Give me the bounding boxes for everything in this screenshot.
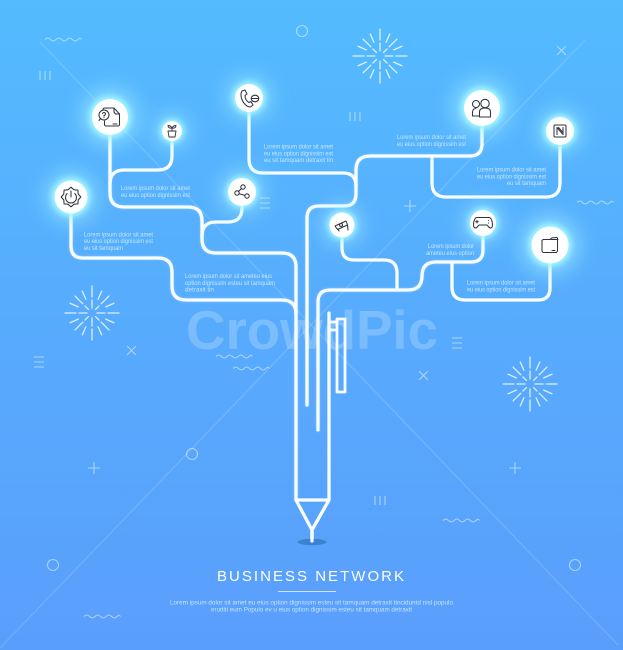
branch: document: [110, 117, 296, 314]
branch: camera: [342, 225, 397, 290]
text: lower left: [185, 273, 275, 294]
tree network glow: [71, 108, 483, 500]
icon: people: [472, 99, 490, 117]
icon: share: [235, 185, 249, 198]
firework left: [65, 286, 119, 340]
text: document: [121, 185, 190, 199]
icon: NFC tag: [554, 125, 566, 137]
icon: game controller: [474, 218, 492, 228]
description: Lorem ipsum dolor sit amet eu eius option dignissim esteu sit tamquam detraxit tinciduntd nisl populo: [170, 600, 453, 606]
description: [170, 600, 453, 614]
branch: NFC: [432, 131, 560, 197]
firework right: [503, 357, 557, 411]
node: document: [80, 87, 140, 147]
pen tip shadow: [298, 539, 326, 545]
firework top: [353, 29, 407, 83]
text: gear: Lorem ipsum dolor sit amet: [84, 232, 153, 238]
branch: gear: [71, 197, 296, 314]
branch: phone: [249, 98, 356, 186]
text: lower left: option dignissim esteu sit tamquam: [185, 280, 275, 287]
text: phone: eu sit tamquam detraxit tin: [264, 157, 333, 164]
branch: folder: [452, 245, 550, 300]
pen body: [296, 312, 329, 542]
node: NFC: [537, 108, 583, 154]
node: phone: [226, 75, 272, 121]
text: people: [397, 134, 466, 148]
text: document: Lorem ipsum dolor sit amet: [121, 185, 190, 192]
text: people: eu eius option dignissim est: [397, 141, 466, 148]
description: eruditi eum Populo ev u eius option dignissim esteu sit tamquam detraxit: [211, 606, 412, 614]
text: gear: eu eius option dignissim est: [84, 238, 153, 245]
watermark: CrowdPic: [186, 299, 438, 361]
cross marks: [127, 46, 566, 380]
text: folder: Lorem ipsum dolor sit amet: [467, 280, 535, 286]
node: camera: [321, 204, 363, 246]
text: game: ameteu eius option: [426, 250, 474, 257]
branch: plant: [110, 131, 172, 184]
node: gear: [44, 170, 98, 224]
menu bars: [34, 198, 462, 367]
plus marks: [88, 200, 521, 474]
triple bars: [40, 71, 385, 505]
node: people: [452, 78, 512, 138]
text: phone: eu eius option dignissim est: [264, 150, 333, 157]
node: share: [219, 169, 265, 215]
text: NFC: Lorem ipsum dolor sit amet: [477, 166, 546, 174]
node: plant: [154, 113, 190, 149]
pen clip: [329, 319, 345, 392]
text: phone: [264, 144, 333, 164]
text: lower left: detraxit tin: [185, 286, 214, 294]
node: game: [462, 202, 504, 244]
icon: document question: [99, 108, 120, 126]
text: people: Lorem ipsum dolor sit amet: [397, 134, 466, 141]
icon: folder: [542, 238, 558, 252]
text: phone: Lorem ipsum dolor sit amet: [264, 144, 333, 150]
text: gear: eu sit tamquam: [84, 245, 123, 252]
icon: security camera: [335, 221, 348, 231]
branch: game and center: [318, 223, 483, 430]
branch: share: [202, 192, 242, 236]
text: game: Lorem ipsum dolor: [428, 243, 475, 250]
branch: people: [307, 108, 482, 405]
pen and branching network: [71, 98, 560, 545]
text: game: [426, 243, 475, 257]
node: folder: [519, 214, 581, 276]
text: gear: [84, 232, 153, 252]
text: NFC: eu sit tamquam: [507, 180, 546, 187]
text: folder: [467, 280, 535, 293]
text: NFC: eu eius option dignissim est: [477, 173, 546, 180]
text: lower left: Lorem ipsum dolor sit ameteu eius: [185, 273, 273, 280]
icon: potted plant: [168, 126, 176, 137]
text: folder: eu eius option dignissim est: [467, 286, 535, 293]
text: NFC: [477, 166, 546, 187]
icon: power gear: [61, 187, 81, 207]
small rings: [48, 26, 580, 570]
title: BUSINESS NETWORK: [217, 568, 404, 585]
title divider: [278, 590, 336, 592]
icon: phone with chat: [241, 90, 259, 107]
text: document: eu eius option dignissim est: [121, 192, 190, 199]
